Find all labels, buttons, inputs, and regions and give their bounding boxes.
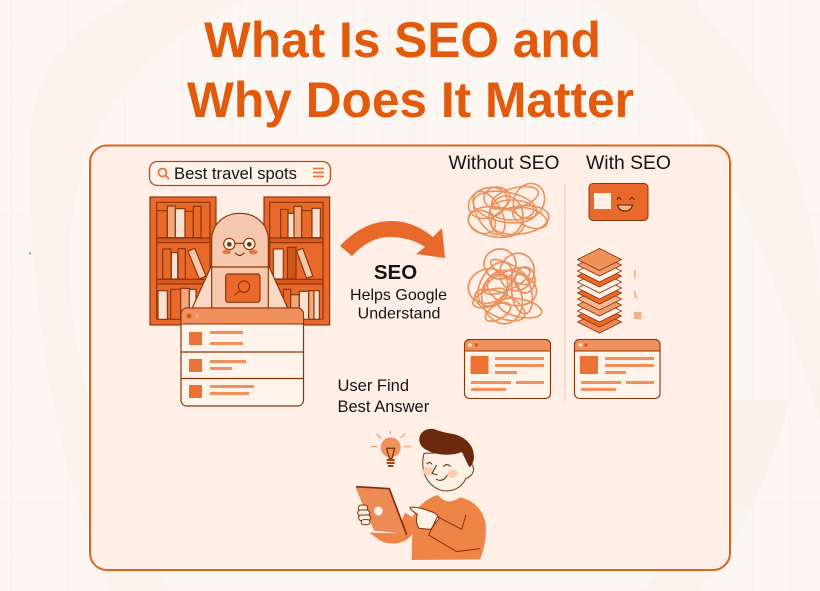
SEO label: Helps Google xyxy=(350,287,447,304)
stray speck xyxy=(29,252,31,254)
search bar xyxy=(150,162,330,186)
scribble: tangled content top xyxy=(464,178,551,241)
robot glasses xyxy=(224,238,255,250)
user label: Best Answer xyxy=(338,398,430,416)
arrow xyxy=(340,221,445,258)
title: What Is SEO and xyxy=(204,12,601,68)
icon: magnifier xyxy=(158,168,169,179)
panel: main content xyxy=(90,146,730,570)
right bookshelf xyxy=(264,197,330,325)
column headings: With SEO xyxy=(586,153,671,174)
column divider xyxy=(564,184,566,401)
icon: light bulb xyxy=(371,431,411,466)
tablet xyxy=(356,487,407,535)
robot chest screen xyxy=(226,274,260,302)
title xyxy=(187,12,634,128)
result rows xyxy=(189,332,202,398)
face xyxy=(423,452,474,491)
user label xyxy=(338,377,430,416)
sweater xyxy=(412,495,486,560)
arm holding tablet xyxy=(369,513,417,544)
SEO label: SEO xyxy=(374,261,417,284)
results panel xyxy=(181,308,304,406)
SEO label xyxy=(350,261,447,322)
user label: User Find xyxy=(338,377,409,395)
column headings xyxy=(448,153,671,174)
illustration: robot librarian with bookshelves xyxy=(150,197,330,325)
left hand xyxy=(358,505,371,525)
column headings: Without SEO xyxy=(448,153,560,174)
pointing hand xyxy=(410,507,439,529)
sleeve lines xyxy=(429,515,480,552)
robot xyxy=(192,213,288,309)
small fragments xyxy=(634,270,642,319)
icon: organized stack of layers xyxy=(578,248,622,333)
hair xyxy=(419,429,474,467)
SEO label: Understand xyxy=(358,306,440,322)
browser card: with SEO xyxy=(574,340,660,398)
neck xyxy=(438,488,459,501)
icon: smiling card xyxy=(589,184,648,220)
illustration: person with tablet and idea xyxy=(356,429,486,560)
browser card: without SEO xyxy=(464,340,550,398)
icon: menu xyxy=(313,168,324,176)
search text: Best travel spots xyxy=(174,165,297,183)
scribble: tangled content bottom xyxy=(463,248,543,328)
left bookshelf xyxy=(150,197,216,325)
title: Why Does It Matter xyxy=(187,72,634,128)
